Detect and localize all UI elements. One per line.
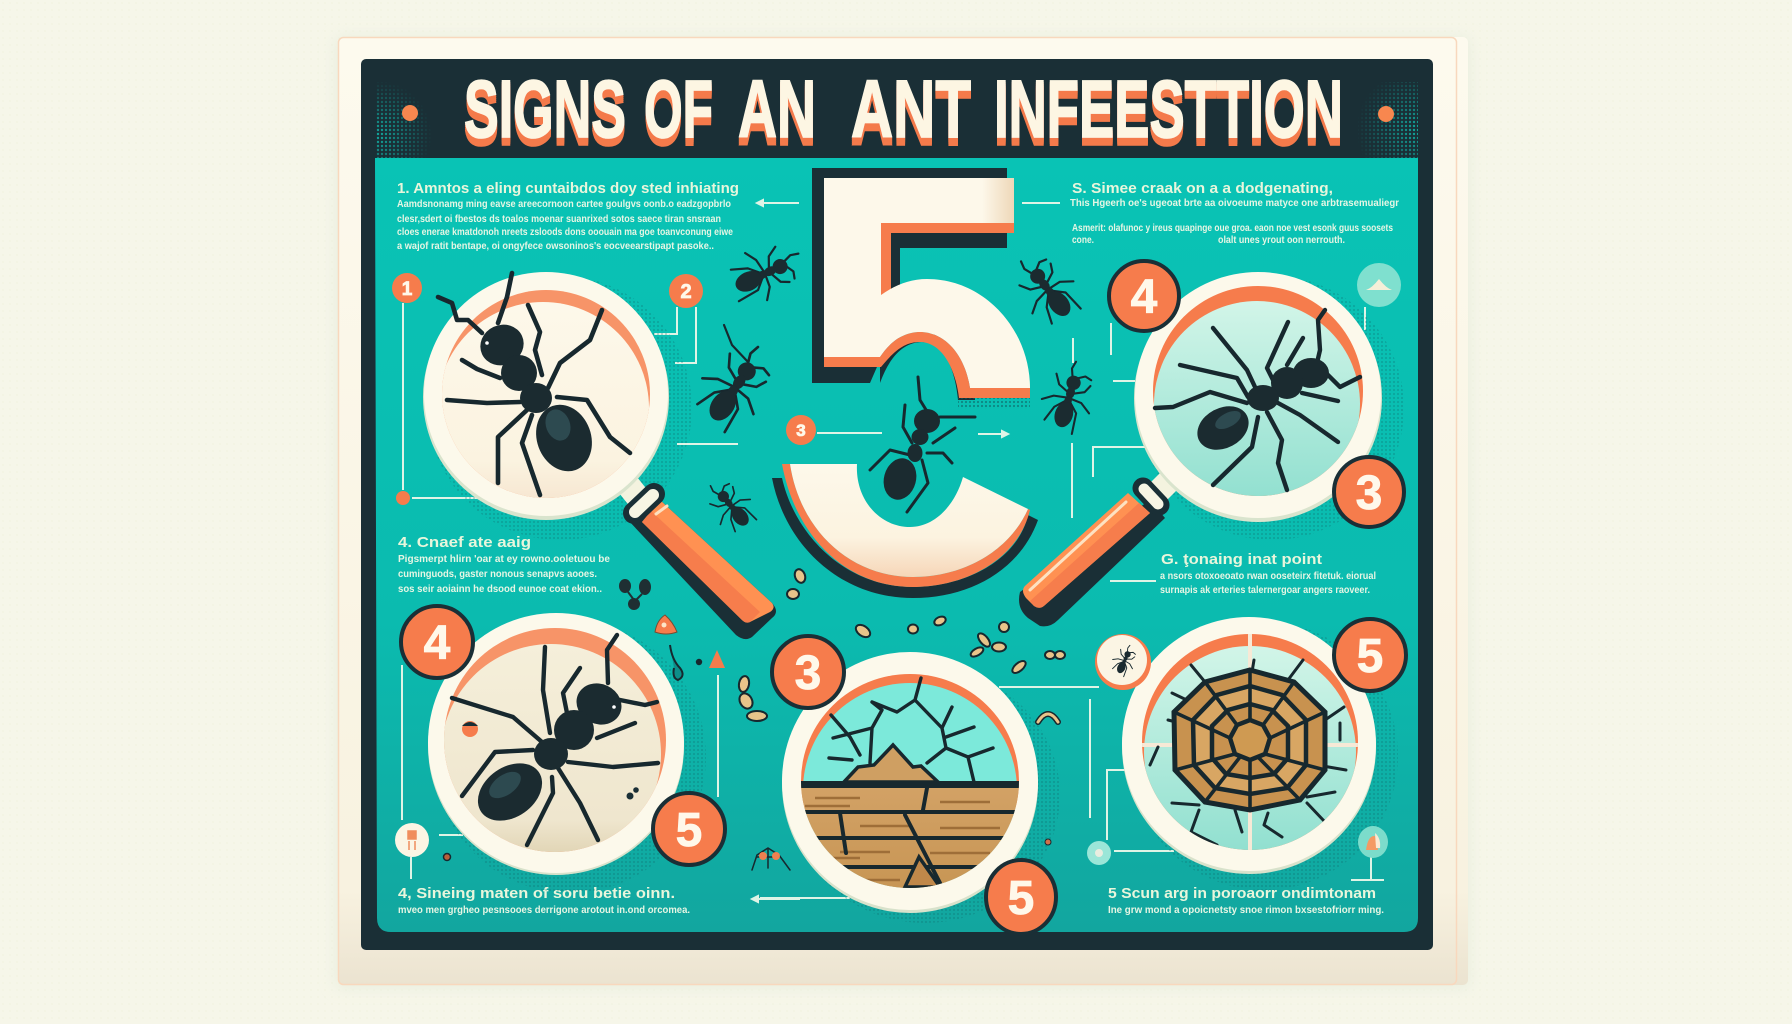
- icon: lower right disc: [1358, 826, 1388, 858]
- text block: sign 6: [1160, 551, 1376, 596]
- tiny ants cluster: [619, 579, 651, 610]
- crumbs and droplets: [444, 568, 1065, 860]
- text block: sign 1: 1. Amntos a eling cuntaibdos doy sted inhiating: [397, 180, 739, 197]
- tiny ant with orange body: [752, 848, 790, 870]
- text block: sign 1: cloes enerae kmatdonoh nreets zsloods dons ooouain ma goe toanvconung eiwe: [397, 226, 733, 238]
- icon: small teal disc: [1087, 841, 1111, 865]
- icon: ant disc: [1095, 634, 1151, 690]
- badge 4 top right: 4: [1131, 271, 1158, 324]
- badge 5 lower left: 5: [676, 804, 702, 857]
- big number five: [772, 168, 1038, 598]
- title: OF: [644, 64, 713, 155]
- text block: sign 3: [1070, 180, 1399, 246]
- magnifier left: lens: [423, 272, 669, 520]
- title: [464, 64, 1343, 155]
- text block: sign 4: 4. Cnaef ate aaig: [398, 534, 531, 551]
- connector dot: [396, 491, 410, 505]
- badge 4 lower left: 4: [424, 617, 451, 670]
- badge 3 right: 3: [1356, 467, 1382, 520]
- text block: bottom left: mveo men grgheo pesnsooes derrigone arotout in.ond orcomea.: [398, 904, 690, 916]
- halftone shadows of magnifiers: [428, 276, 1404, 923]
- connector lines: [402, 200, 1384, 902]
- magnifier lower right: wood web: [1122, 617, 1376, 874]
- text block: bottom left: [398, 885, 690, 916]
- icon: mound disc: [1357, 263, 1401, 307]
- text block: sign 3: olalt unes yrout oon nerrouth.: [1218, 234, 1345, 246]
- text block: bottom left: 4, Sineing maten of soru betie oinn.: [398, 885, 675, 902]
- magnifier lower left: ant: [452, 635, 658, 845]
- magnifier right: lens: [1134, 272, 1382, 522]
- magnifier lower left: lens: [428, 613, 684, 875]
- title: ANT: [851, 64, 971, 155]
- magnifier left: handle: [620, 475, 776, 639]
- badge small 3: [786, 415, 816, 445]
- center ant: [870, 377, 975, 512]
- title dot left: [402, 105, 418, 121]
- badge 3 center: 3: [795, 647, 821, 700]
- text block: sign 6: G. ţonaing inat point: [1161, 551, 1322, 568]
- badge 5 right: [1334, 619, 1406, 691]
- text block: sign 3: S. Simee craak on a a dodgenating,: [1072, 180, 1333, 197]
- text block: sign 1: Aamdsnonamg ming eavse areecornoon cartee goulgvs oonb.o eadzgopbrlo: [397, 198, 731, 210]
- magnifier left: ant: [438, 273, 630, 495]
- badge small 2: 2: [680, 281, 692, 303]
- title: SIGNS: [464, 64, 626, 155]
- text block: sign 3: This Hgeerh oe's ugeoat brte aa oivoeume matyce one arbtrasemualiegr: [1070, 197, 1399, 209]
- badge small 1: 1: [402, 279, 413, 300]
- badge small 3: 3: [796, 421, 806, 440]
- magnifier right: ant: [1155, 310, 1360, 490]
- badge small 1: [392, 273, 422, 303]
- text block: sign 6: surnapis ak erteries talernergoar angers raoveer.: [1160, 584, 1370, 596]
- badge 4 top right: [1109, 261, 1179, 331]
- text block: sign 4: sos seir aoiainn he dsood eunoe coat ekion..: [398, 583, 602, 595]
- text block: sign 6: a nsors otoxoeoato rwan ooseteirx fitetuk. eiorual: [1160, 570, 1376, 582]
- badge 3 right: [1334, 457, 1404, 527]
- badge 3 center: [772, 636, 844, 708]
- text block: sign 3: cone.: [1072, 234, 1094, 246]
- text block: bottom right: 5 Scun arg in poroaorr ondimtonam: [1108, 885, 1376, 902]
- title dot right: [1378, 106, 1394, 122]
- poster card: [336, 37, 1469, 987]
- badge 5 lower left: [653, 793, 725, 865]
- text block: sign 4: [398, 534, 610, 595]
- text block: sign 4: cuminguods, gaster nonous senapvs aooes.: [398, 568, 597, 580]
- magnifier right: handle: [1019, 478, 1172, 626]
- text block: sign 1: [397, 180, 739, 252]
- text block: bottom right: Ine grw mond a opoicnetsty snoe rimon bxsestofriorr ming.: [1108, 904, 1384, 916]
- badge 5 right: 5: [1357, 630, 1383, 683]
- dark frame: [361, 59, 1433, 950]
- badge 4 lower left: [401, 606, 473, 678]
- teal panel: [375, 158, 1418, 932]
- header halftone: right corner: [1358, 82, 1418, 158]
- header halftone: left corner: [376, 85, 427, 158]
- text block: sign 1: a wajof ratit bentape, oi ongyfece owsoninos's eocveearstipapt pasoke..: [397, 240, 714, 252]
- text block: sign 3: Asmerit: olafunoc y ireus quapinge oue groa. eaon noe vest esonk guus soosets: [1072, 222, 1393, 234]
- icon: lower left disc: [395, 823, 429, 857]
- text block: sign 4: Pigsmerpt hlirn 'oar at ey rowno.ooletuou be: [398, 553, 610, 565]
- title: INFEESTTION: [994, 64, 1343, 155]
- badge small 2: [669, 274, 703, 308]
- text block: bottom right: [1108, 885, 1384, 916]
- badge 5 bottom center: 5: [1008, 872, 1034, 925]
- title: AN: [738, 64, 816, 155]
- badge 5 bottom center: [986, 860, 1056, 934]
- small ants: [684, 233, 1102, 539]
- magnifier center: cracked wood: [782, 652, 1038, 913]
- text block: sign 1: clesr,sdert oi fbestos ds toalos moenar suanrixed sotos saece tiran snsraan: [397, 213, 721, 225]
